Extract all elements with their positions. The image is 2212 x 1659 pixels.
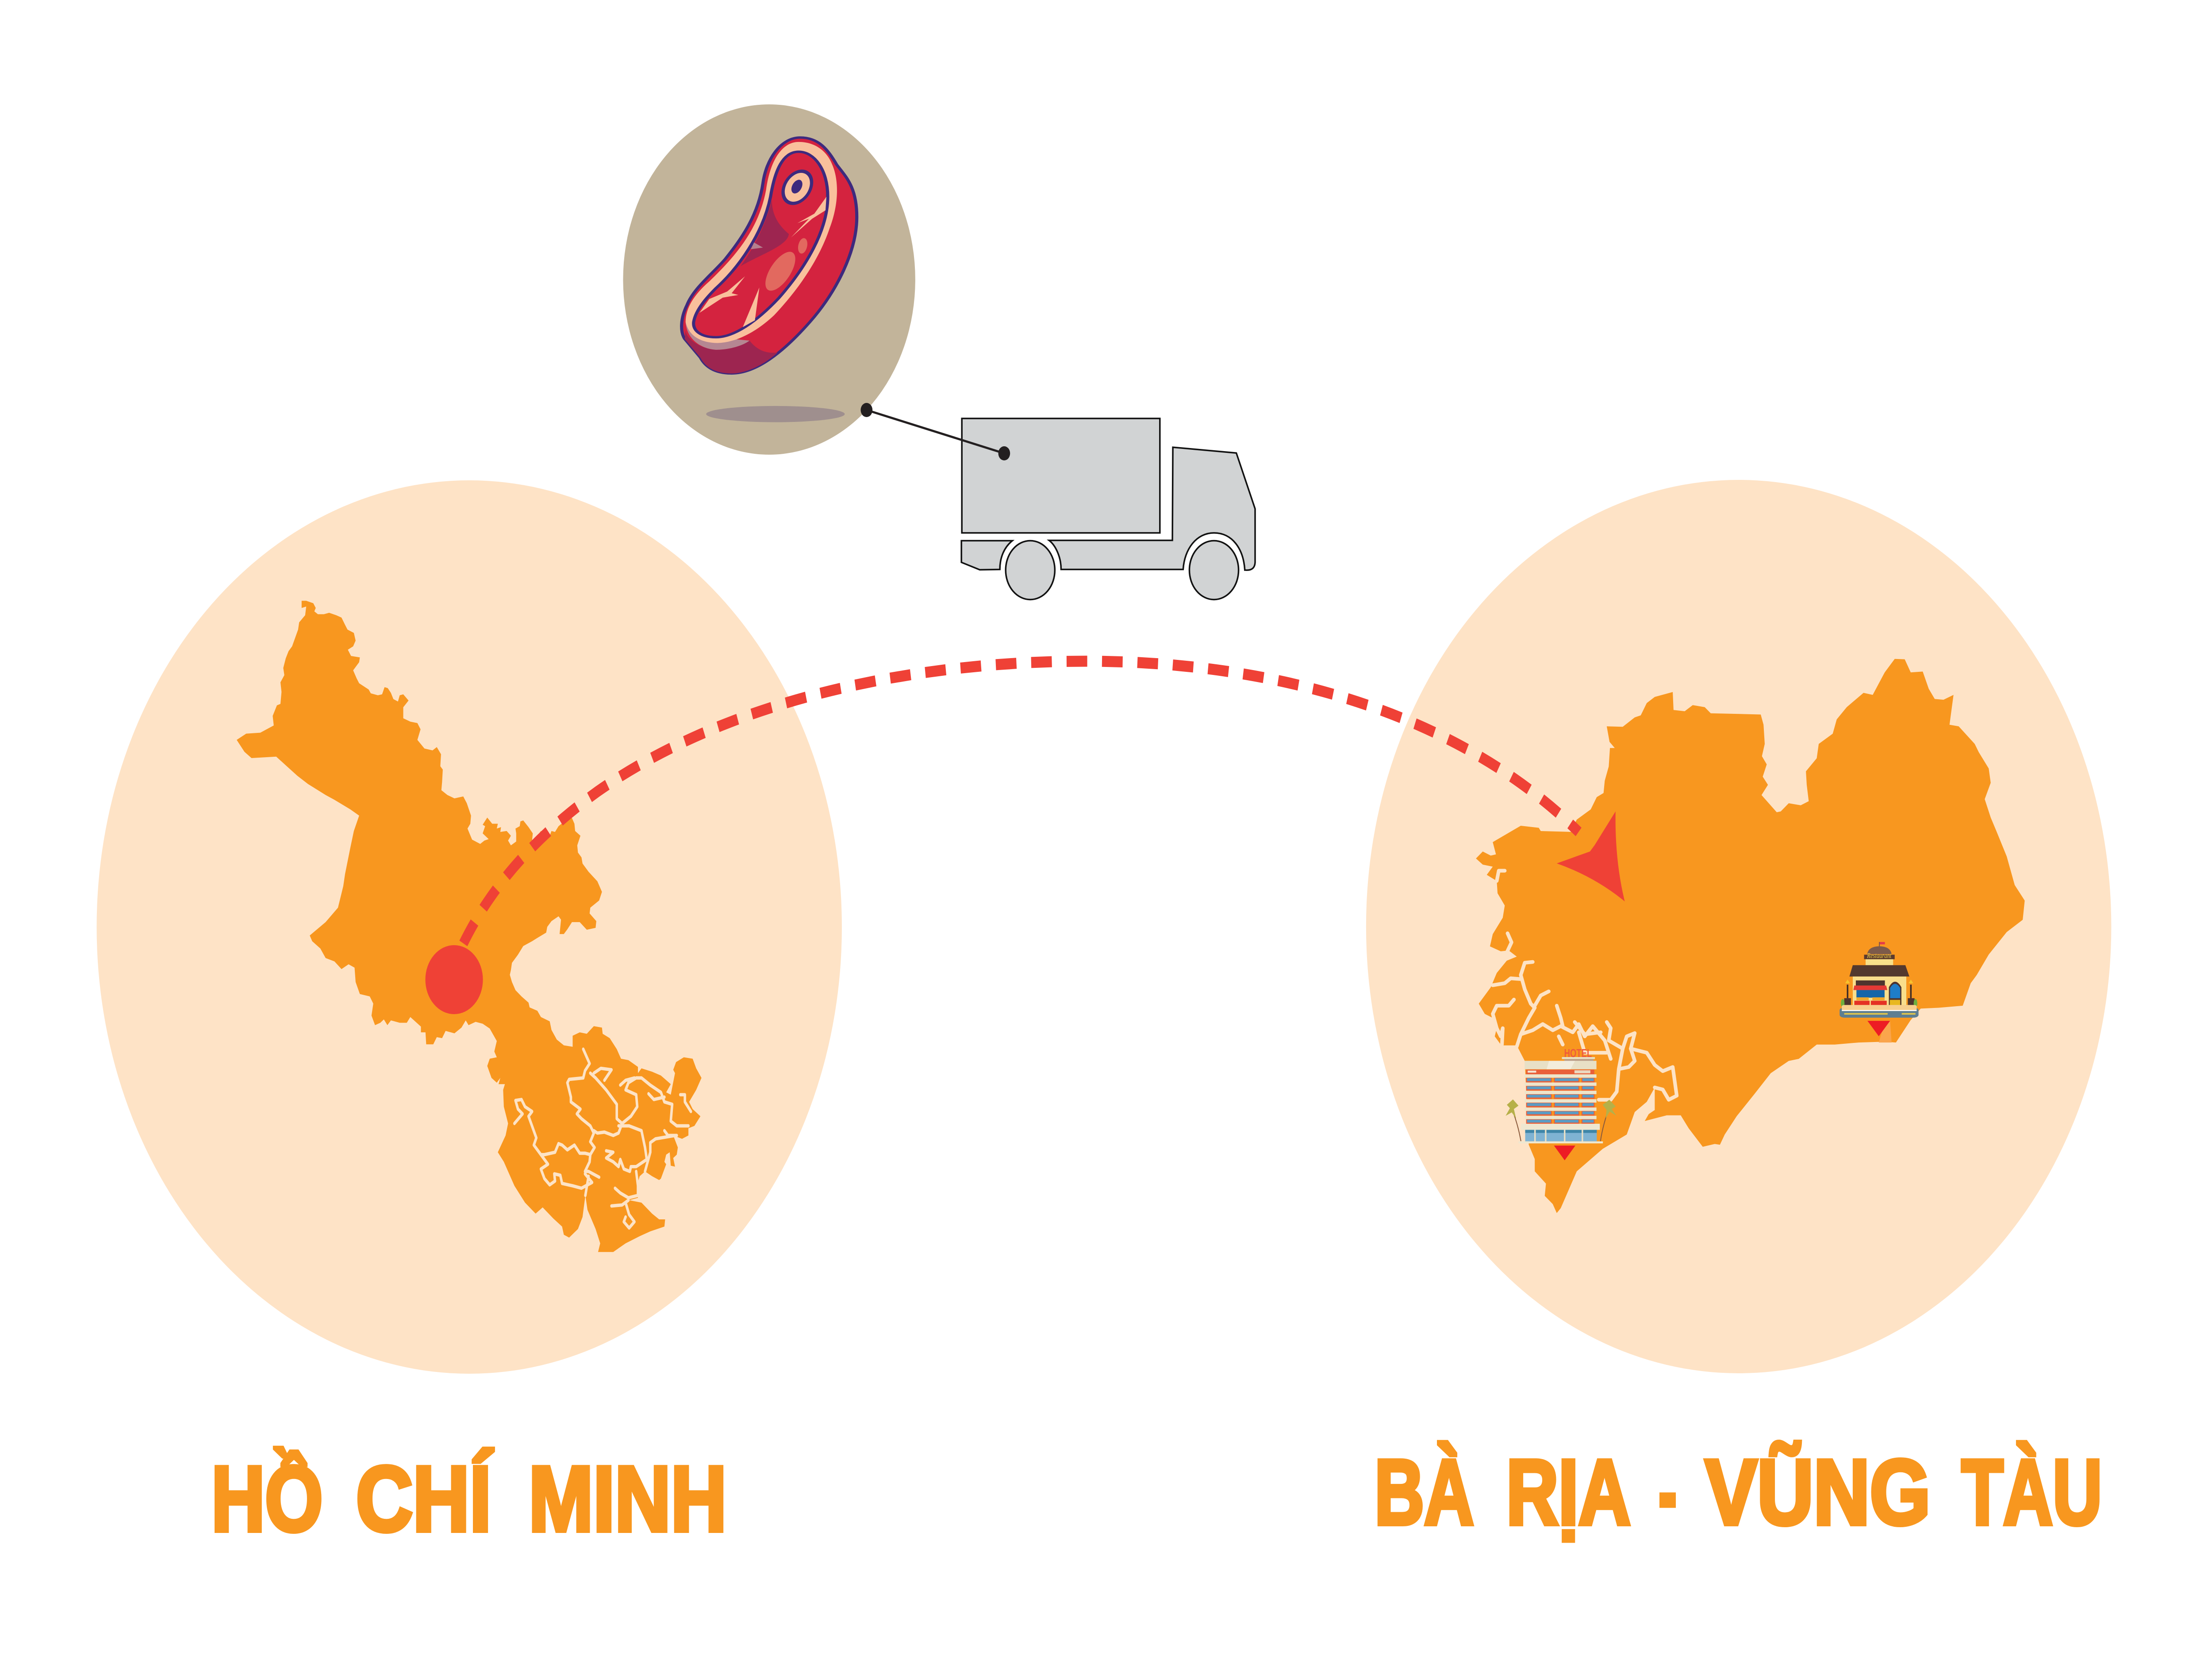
icon detail: red location pin xyxy=(1554,1146,1575,1160)
icon: hotel xyxy=(1505,1057,1617,1160)
connector: line from meat bubble to truck xyxy=(860,403,1010,460)
heading: Ba Ria - Vung Tau: - xyxy=(1659,1441,1677,1544)
marker: origin red dot xyxy=(425,945,483,1014)
heading: Ba Ria - Vung Tau: VŨNG xyxy=(1705,1441,1931,1544)
heading: Ba Ria - Vung Tau: TÀU xyxy=(1962,1441,2102,1544)
icon: raw beef steak xyxy=(682,138,857,422)
heading: Ho Chi Minh: MINH xyxy=(529,1447,727,1551)
panel: meat bubble xyxy=(623,104,915,455)
heading: Ho Chi Minh: HỒ xyxy=(211,1447,323,1551)
heading: Ba Ria - Vung Tau: RỊA xyxy=(1506,1441,1631,1544)
map: Ho Chi Minh City xyxy=(237,601,702,1252)
text: hotel sign: HOTEL xyxy=(1564,1047,1592,1060)
bubble background xyxy=(623,104,915,455)
heading: Ho Chi Minh: CHÍ xyxy=(356,1447,493,1551)
route: dashed red flight path xyxy=(463,661,1578,943)
heading: Ba Ria - Vung Tau: BÀ xyxy=(1375,1441,1474,1544)
panel: Ho Chi Minh circle xyxy=(96,480,842,1374)
panel: Ba Ria - Vung Tau circle xyxy=(1366,480,2111,1373)
text: restaurant sign: Restaurant xyxy=(1867,952,1892,960)
icon detail: hotel sign base xyxy=(1562,1057,1595,1059)
arrow: red destination arrowhead xyxy=(1557,812,1625,901)
icon detail: red location pin xyxy=(1867,1021,1890,1036)
map: Ba Ria - Vung Tau xyxy=(1476,659,2025,1213)
icon: restaurant xyxy=(1839,942,1919,1042)
icon detail: dome xyxy=(1867,946,1892,954)
icon: delivery truck xyxy=(961,418,1255,600)
